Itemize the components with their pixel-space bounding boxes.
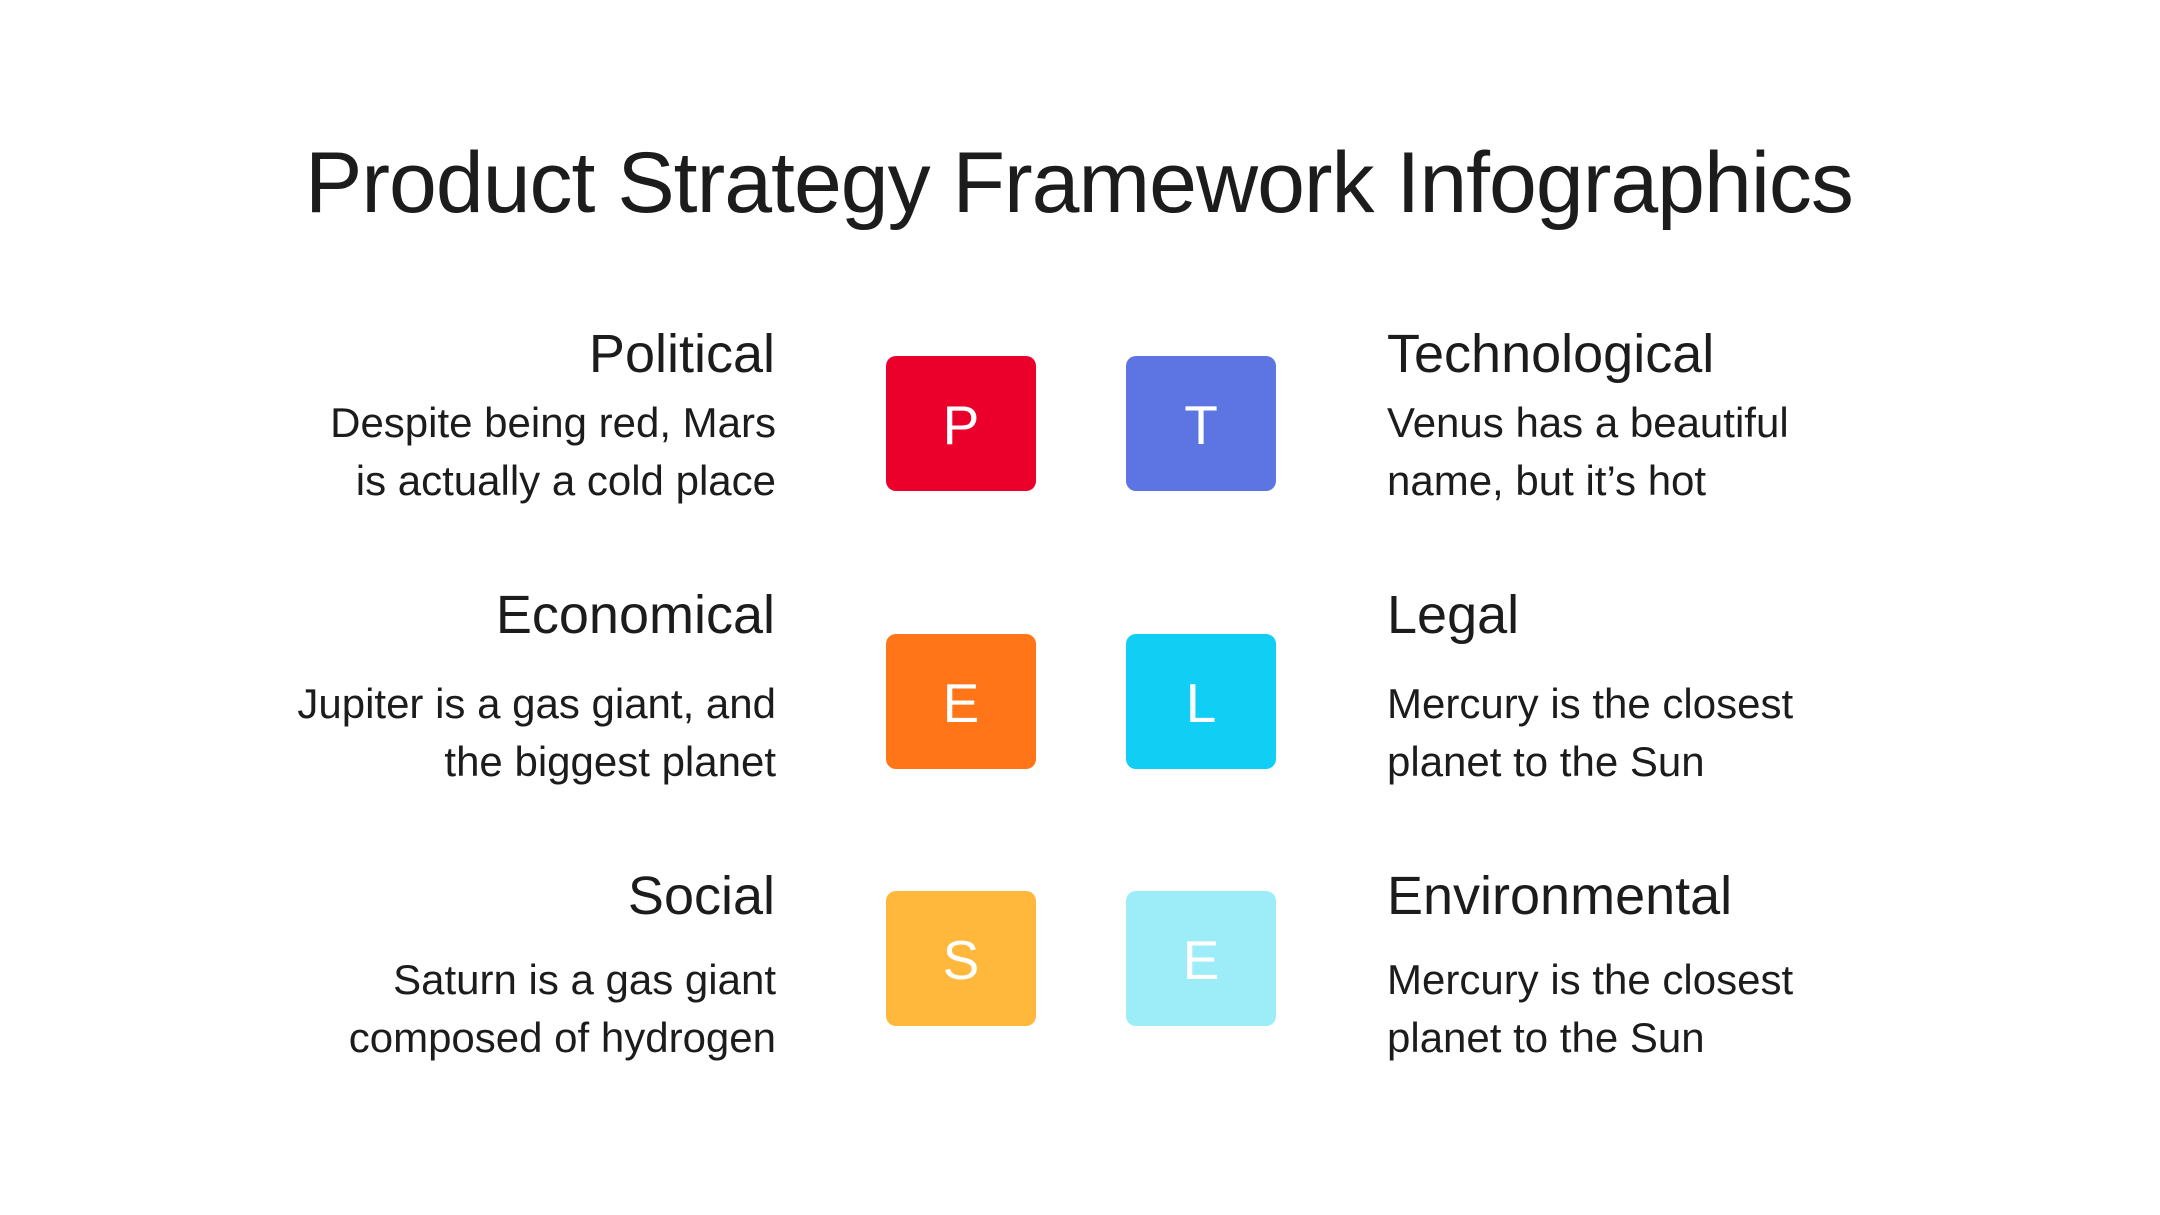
tile: E environmental: E [1183,929,1219,991]
text: Legal description [1387,680,1793,785]
tile: E [886,634,1036,769]
text: Legal description: Mercury is the closest [1387,680,1793,727]
tile: L: L [1186,672,1216,734]
text: Social description: Saturn is a gas giant [393,956,776,1003]
text: Social description [349,956,776,1061]
heading: Economical: Economical [496,585,775,645]
tile: P: P [943,394,979,456]
heading: Technological: Technological [1387,324,1714,384]
tile: E environmental [1126,891,1276,1026]
tile: E: E [943,672,979,734]
tile: S [886,891,1036,1026]
text: Economical description: Jupiter is a gas giant, and [297,680,776,727]
heading: Legal: Legal [1387,585,1519,645]
text: Political description: Despite being red, Mars [330,399,776,446]
text: Economical description: the biggest planet [444,738,776,785]
text: Technological description: Venus has a beautiful [1387,399,1789,446]
text: Legal description: planet to the Sun [1387,738,1705,785]
text: Technological description: name, but it’s hot [1387,457,1706,504]
tile: T: T [1184,394,1218,456]
tile: P [886,356,1036,491]
title: Product Strategy Framework Infographics [305,135,1853,231]
text: Political description [330,399,776,504]
text: Economical description [297,680,776,785]
tile: S: S [943,929,979,991]
heading: Social: Social [628,866,775,926]
text: Environmental description: planet to the Sun [1387,1014,1705,1061]
text: Political description: is actually a cold place [356,457,776,504]
text: Technological description [1387,399,1789,504]
text: Social description: composed of hydrogen [349,1014,776,1061]
text: Environmental description [1387,956,1793,1061]
text: Environmental description: Mercury is the closest [1387,956,1793,1003]
heading: Environmental: Environmental [1387,866,1732,926]
heading: Political: Political [589,324,775,384]
tile: L [1126,634,1276,769]
tile: T [1126,356,1276,491]
